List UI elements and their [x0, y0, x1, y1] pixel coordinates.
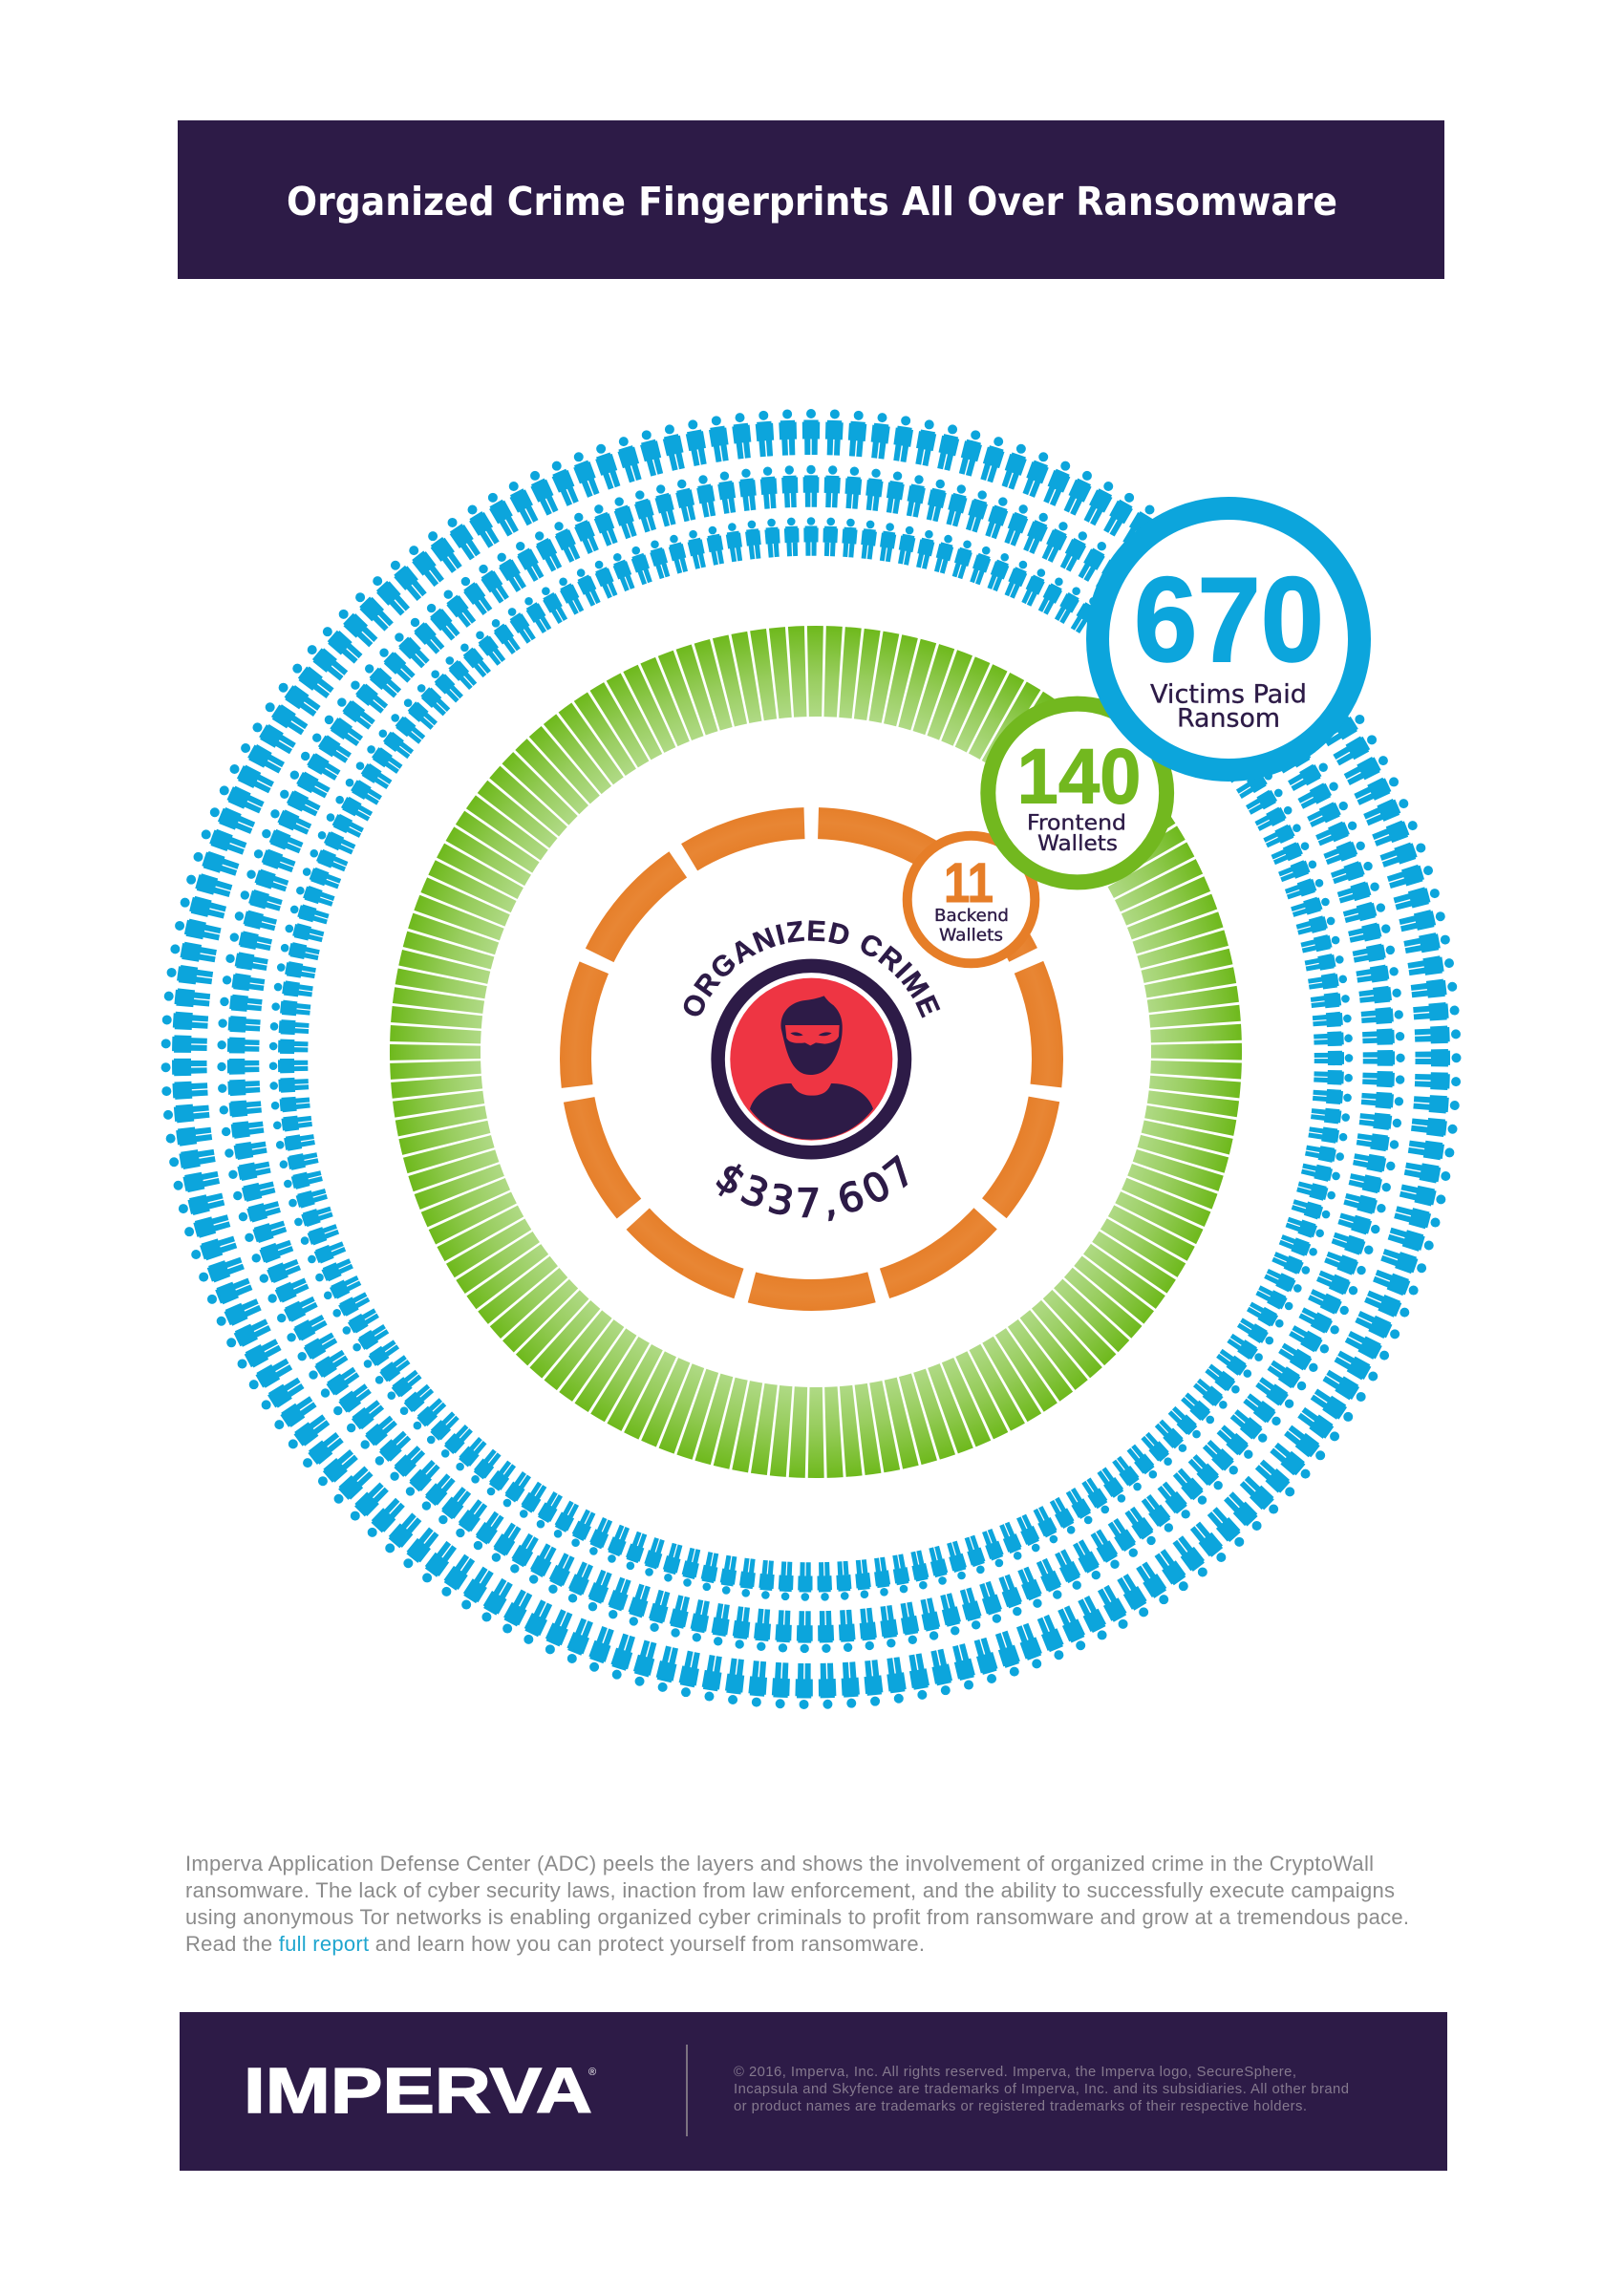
logo: Imperva: IMPERVA: [244, 2055, 592, 2127]
legal text: Incapsula and Skyfence are trademarks of Imperva, Inc. and its subsidiaries. All other brand: [734, 2082, 1349, 2097]
description paragraph: using anonymous Tor networks is enabling organized cyber criminals to profit from ransomware and grow at a tremendous pace.: [185, 1905, 1409, 1929]
orange ring: backend wallet segments: [575, 824, 1047, 1296]
badge: 11 backend wallets: 11: [944, 852, 994, 914]
outer row of people: [0, 146, 1624, 1972]
badge: 140 frontend wallets: Frontend: [1027, 810, 1126, 835]
legal text: [687, 2045, 1349, 2136]
central emblem: masked criminal: [718, 966, 905, 1152]
legal text: or product names are trademarks or registered trademarks of their respective holders.: [734, 2099, 1307, 2114]
badge: 11 backend wallets: Backend: [934, 907, 1009, 926]
badge: 670 victims paid ransom: [1098, 508, 1359, 770]
header banner: [178, 120, 1444, 279]
badge: 140 frontend wallets: 140: [1016, 734, 1141, 820]
badge: 670 victims paid ransom: 670: [1134, 552, 1324, 687]
badge: 670 victims paid ransom: Ransom: [1177, 703, 1280, 734]
badge: 11 backend wallets: [908, 836, 1035, 963]
badge: 140 frontend wallets: Wallets: [1037, 831, 1118, 856]
badge: 140 frontend wallets: [988, 704, 1166, 882]
middle row of people: [0, 225, 1624, 1893]
description paragraph: [185, 1852, 1409, 1956]
description paragraph: Read the full report and learn how you can protect yourself from ransomware.: [185, 1932, 925, 1956]
description paragraph: ransomware. The lack of cyber security laws, inaction from law enforcement, and the ability to successfully execute campaigns: [185, 1878, 1395, 1902]
description paragraph: Imperva Application Defense Center (ADC) peels the layers and shows the involvement of organized crime in the CryptoWall: [185, 1852, 1374, 1875]
footer banner: [180, 2012, 1447, 2171]
inner row of people: [51, 298, 1571, 1820]
legal text: © 2016, Imperva, Inc. All rights reserved. Imperva, the Imperva logo, SecureSphere,: [734, 2065, 1296, 2080]
curved label: total amount: $337,607: [716, 1154, 908, 1221]
logo: Imperva: ®: [588, 2067, 596, 2078]
green ring: frontend wallet bars: [436, 671, 1196, 1433]
badge: 11 backend wallets: Wallets: [939, 926, 1003, 945]
people rings: victims: [0, 146, 1624, 1972]
icon: masked figure: [750, 996, 873, 1140]
title: Organized Crime Fingerprints All Over Ransomware: [287, 179, 1337, 225]
badge: 670 victims paid ransom: Victims Paid: [1150, 680, 1307, 710]
curved label: organized crime: ORGANIZED CRIME: [684, 920, 940, 1018]
